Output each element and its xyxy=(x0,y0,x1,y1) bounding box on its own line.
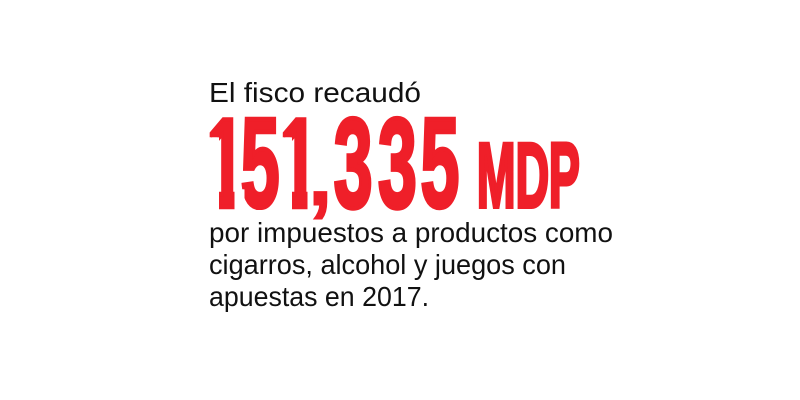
body text: description xyxy=(209,217,613,312)
body text: description: por impuestos a productos como xyxy=(209,217,613,248)
headline figure: 151,335 MDP xyxy=(210,116,580,220)
heading: intro text: El fisco recaudó xyxy=(209,77,421,108)
number: 335: 335 xyxy=(334,92,459,234)
body text: description: apuestas en 2017. xyxy=(209,281,429,312)
body text: description: cigarros, alcohol y juegos con xyxy=(209,249,566,280)
unit: MDP: MDP xyxy=(477,125,580,227)
number: comma: , xyxy=(308,125,333,225)
number: 151: 151 xyxy=(206,92,318,234)
